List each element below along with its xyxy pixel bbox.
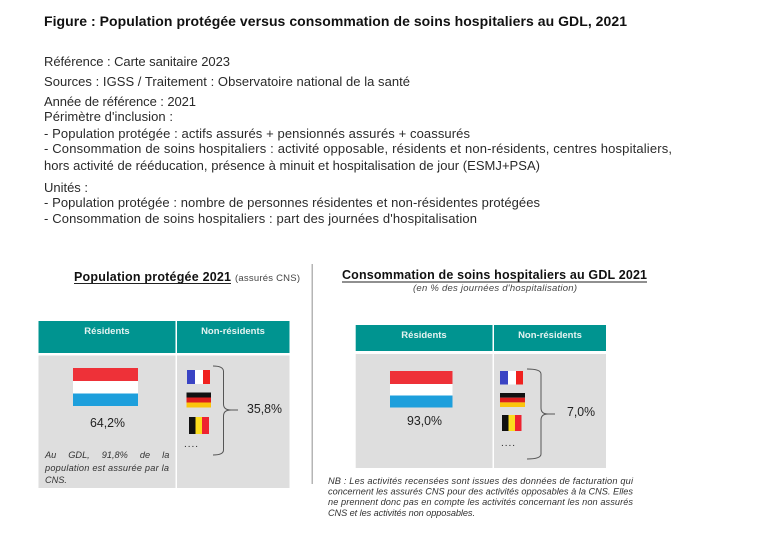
dots: ....: [501, 438, 515, 449]
text block: metadata: Sources : IGSS / Traitement : Observatoire national de la santé: [44, 74, 410, 89]
note: population assurée: Au GDL, 91,8% de la: [44, 450, 169, 460]
panel: consommation de soins: [328, 268, 647, 518]
table header: non-résidents: Non-résidents: [201, 326, 265, 337]
brace: [213, 366, 238, 455]
text block: metadata: - Consommation de soins hospitaliers : activité opposable, résidents et non-résidents, centres hospitaliers,: [44, 141, 672, 156]
cell: résidents: [38, 356, 176, 488]
brace: [527, 369, 555, 459]
icon: France flag: [187, 370, 210, 384]
icon: Luxembourg flag: [390, 371, 452, 408]
text block: metadata: - Population protégée : nombre de personnes résidentes et non-résidentes protégées: [44, 195, 540, 210]
cell: non-résidents: [177, 356, 290, 488]
note: NB: [328, 476, 634, 518]
table header: résidents: Résidents: [401, 330, 447, 341]
dots: ....: [184, 439, 198, 450]
heading: population protégée: Population protégée 2021: [74, 270, 231, 284]
icon: Germany flag: [500, 393, 525, 407]
note: population assurée: [44, 450, 169, 485]
table header: résidents: [356, 325, 492, 351]
note: NB: NB : Les activités recensées sont issues des données de facturation qui: [328, 476, 634, 486]
subheading: (en % des journées d'hospitalisation): [413, 283, 577, 294]
icon: Belgium flag: [189, 417, 209, 434]
icon: Germany flag: [186, 392, 211, 408]
title: Figure : Population protégée versus consommation de soins hospitaliers au GDL, 2021: [44, 13, 627, 29]
note: NB: CNS et les activités non opposables.: [328, 508, 475, 518]
note: population assurée: population est assurée par la: [44, 463, 169, 473]
text block: metadata: Référence : Carte sanitaire 2023: [44, 54, 230, 69]
note: population assurée: CNS.: [45, 475, 67, 485]
text block: metadata: Année de référence : 2021: [44, 94, 196, 109]
text block: metadata: Unités :: [44, 180, 88, 195]
text block: metadata: hors activité de rééducation, présence à minuit et hospitalisation de jour (ESMJ+PSA): [44, 158, 540, 173]
text block: metadata: - Population protégée : actifs assurés + pensionnés assurés + coassurés: [44, 126, 470, 141]
text block: metadata: - Consommation de soins hospitaliers : part des journées d'hospitalisation: [44, 211, 477, 226]
table header: résidents: [38, 321, 176, 353]
heading: population protégée: (assurés CNS): [235, 273, 300, 284]
value: non-résidents 7,0%: 7,0%: [567, 404, 595, 419]
value: non-résidents 35,8%: 35,8%: [247, 401, 282, 416]
table header: résidents: Résidents: [84, 326, 130, 337]
table header: non-résidents: [177, 321, 290, 353]
table header: non-résidents: Non-résidents: [518, 330, 582, 341]
text block: metadata: [44, 54, 672, 226]
panel: population protégée: [38, 270, 300, 488]
icon: France flag: [500, 371, 523, 384]
heading: consommation de soins: Consommation de soins hospitaliers au GDL 2021: [342, 268, 647, 282]
cell: résidents: [356, 354, 492, 468]
cell: non-résidents: [494, 354, 606, 468]
table header: non-résidents: [494, 325, 606, 351]
note: NB: concernent les assurés CNS pour des activités opposables à la CNS. Elles: [328, 486, 633, 496]
text block: metadata: Périmètre d'inclusion :: [44, 109, 173, 124]
value: résidents 93,0%: 93,0%: [407, 413, 442, 428]
icon: Luxembourg flag: [73, 368, 138, 406]
note: NB: ne prennent donc pas en compte les activités concernant les non assurés: [328, 497, 633, 507]
value: résidents 64,2%: 64,2%: [90, 415, 125, 430]
heading: population protégée: [74, 270, 300, 284]
divider: [312, 264, 313, 484]
icon: Belgium flag: [502, 415, 522, 431]
